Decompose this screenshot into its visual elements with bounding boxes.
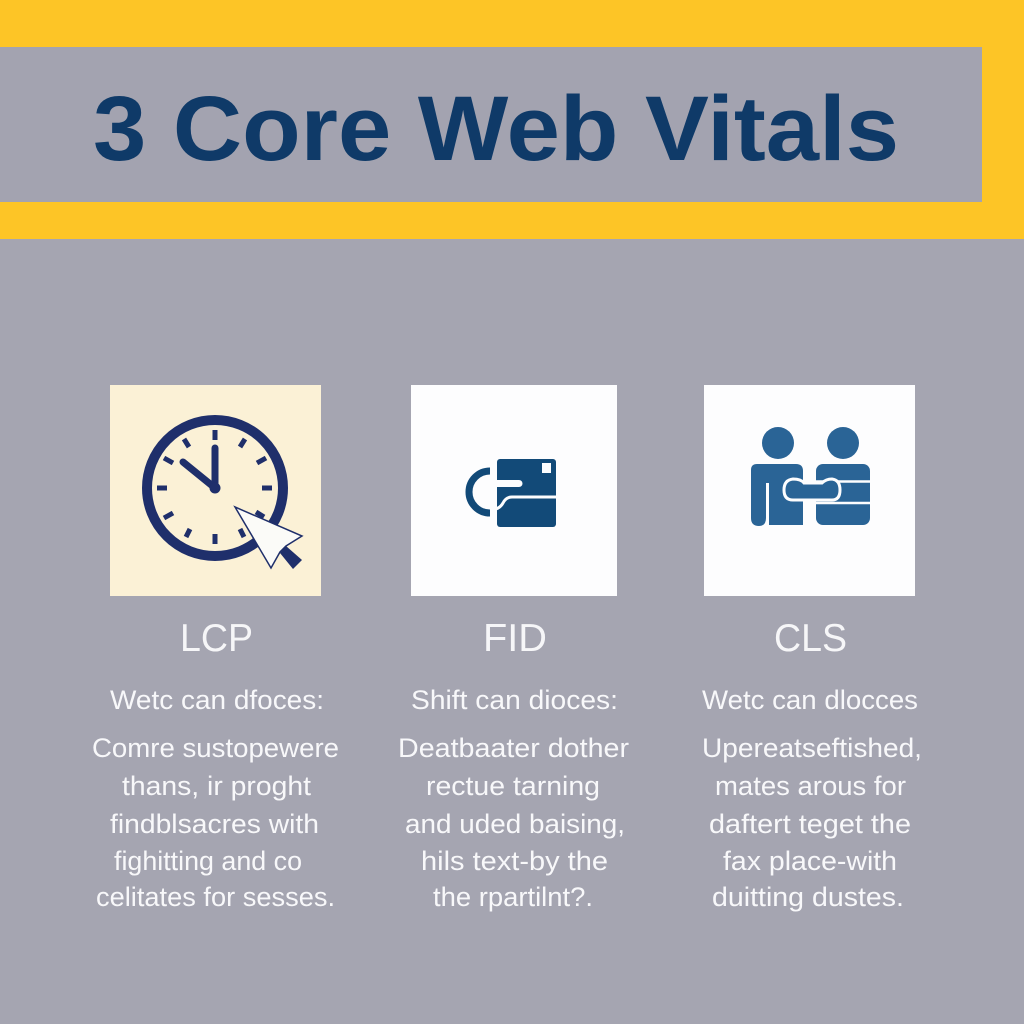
description: FID: rectue tarning <box>426 771 600 801</box>
description: LCP: thans, ir proght <box>122 771 312 801</box>
panel: CLS <box>702 385 922 912</box>
description: CLS: fax place-with <box>723 846 897 876</box>
header band <box>0 0 1024 239</box>
icon: card with hook <box>411 385 617 596</box>
icon: two people shaking hands <box>704 385 915 596</box>
panel: LCP <box>92 385 339 912</box>
metric name: FID: FID <box>483 617 547 660</box>
description: CLS: duitting dustes. <box>712 882 904 912</box>
subheading: FID: Shift can dioces: <box>411 685 618 715</box>
description: CLS: daftert teget the <box>709 809 911 839</box>
subheading: LCP: Wetc can dfoces: <box>110 685 324 715</box>
description: FID: the rpartilnt?. <box>433 882 593 912</box>
description: CLS: Upereatseftished, <box>702 733 922 763</box>
description: FID: Deatbaater dother <box>398 733 629 763</box>
panel: FID <box>398 385 629 912</box>
description: CLS: mates arous for <box>715 771 906 801</box>
metric name: LCP: LCP <box>180 617 253 660</box>
title: 3 Core Web Vitals <box>93 78 899 180</box>
icon: clock with cursor <box>110 385 321 596</box>
description: FID: and uded baising, <box>405 809 625 839</box>
subheading: CLS: Wetc can dlocces <box>702 685 918 715</box>
description: LCP: findblsacres with <box>110 809 319 839</box>
description: LCP <box>92 733 339 912</box>
metric name: CLS: CLS <box>774 617 847 660</box>
description: FID: hils text-by the <box>421 846 608 876</box>
description: FID <box>398 733 629 912</box>
description: LCP: fighitting and co <box>114 846 302 876</box>
description: LCP: Comre sustopewere <box>92 733 339 763</box>
description: CLS <box>702 733 922 912</box>
description: LCP: celitates for sesses. <box>96 882 335 912</box>
